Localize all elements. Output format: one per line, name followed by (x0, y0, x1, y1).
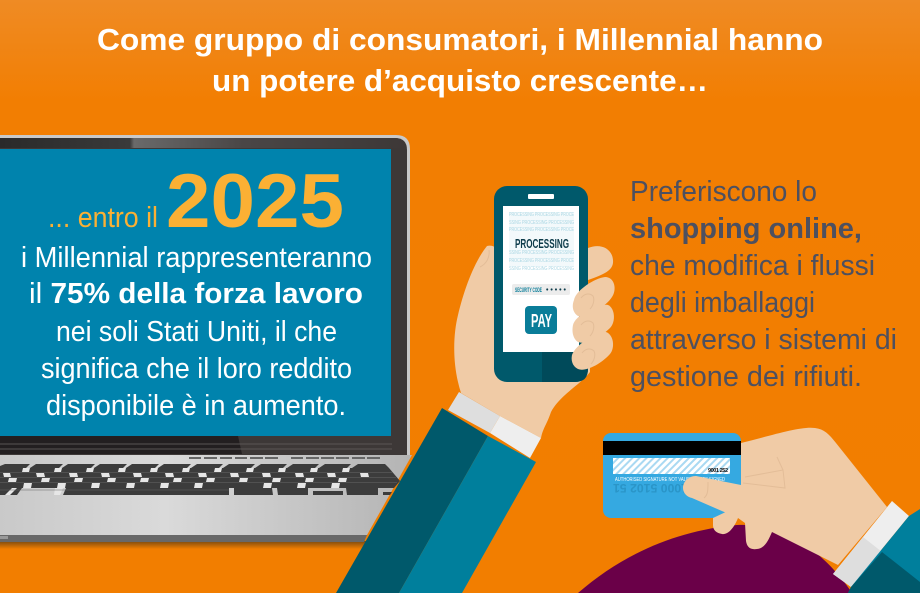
processing text: PROCESSING PROCESSING PROCE (509, 227, 574, 233)
laptop shadow (0, 541, 368, 549)
hand palm (454, 246, 613, 438)
processing text (509, 212, 574, 272)
thumb crease (480, 250, 489, 267)
hand (713, 428, 887, 565)
mirrored card number: 1000 5102 51 (613, 481, 688, 495)
purple semicircle (578, 525, 852, 593)
pay button: PAY (531, 311, 552, 331)
laptop front strip (0, 535, 367, 542)
screen text: nei soli Stati Uniti, il che (56, 316, 337, 348)
right text block: degli imballaggi (630, 287, 815, 319)
screen text: disponibile è in aumento. (46, 390, 346, 422)
processing text: PROCESSING PROCESSING PROCE (509, 212, 574, 218)
left sleeve and hand holding phone (336, 246, 613, 593)
right text block: gestione dei rifiuti. (630, 361, 862, 393)
security code: ••••• (546, 287, 567, 294)
knuckle creases (704, 457, 785, 498)
processing text: SSING PROCESSING PROCESSING (509, 220, 574, 226)
right text block: che modifica i flussi (630, 250, 875, 282)
screen headline: ... entro il (48, 202, 158, 234)
title: Come gruppo di consumatori, i Millennial hanno (97, 22, 823, 57)
security code: SECURITY CODE (515, 288, 542, 294)
right hand holding card (683, 428, 920, 593)
credit card (603, 433, 741, 518)
screen text: il 75% della forza lavoro (29, 278, 363, 310)
card code: 9001 252 (708, 468, 728, 474)
processing text: SSING PROCESSING PROCESSING (509, 266, 574, 272)
authorised signature: AUTHORISED SIGNATURE NOT VALID UNLESS SIGNED (615, 477, 725, 483)
processing text: PROCESSING PROCESSING PROCE (509, 258, 574, 264)
sleeve (848, 509, 920, 593)
cuff (833, 501, 909, 587)
function key dashes (189, 457, 380, 459)
laptop (0, 135, 412, 549)
screen text (21, 242, 372, 422)
phone speaker (528, 194, 554, 199)
laptop screen (0, 149, 391, 436)
index finger (683, 476, 745, 518)
laptop base (0, 455, 412, 535)
laptop bezel (0, 135, 410, 456)
title: un potere d’acquisto crescente… (212, 63, 708, 98)
screen text: significa che il loro reddito (41, 353, 352, 385)
sleeve (336, 408, 488, 593)
phone body (494, 186, 588, 382)
screen headline (48, 159, 344, 244)
processing text: SSING PROCESSING PROCESSING (509, 250, 574, 256)
magnetic strip (603, 441, 741, 455)
title (97, 22, 823, 98)
right text block: attraverso i sistemi di (630, 324, 897, 356)
pay button (525, 306, 557, 334)
right text block (630, 176, 897, 393)
cuff (448, 392, 500, 433)
processing heading: PROCESSING (515, 236, 569, 251)
signature panel (613, 458, 730, 474)
phone hand fingers (572, 277, 615, 370)
phone screen (503, 206, 579, 352)
screen text: i Millennial rappresenteranno (21, 242, 372, 274)
keyboard (0, 464, 400, 495)
right text block: shopping online, (630, 213, 862, 245)
phone (494, 186, 588, 382)
right text block: Preferiscono lo (630, 176, 817, 208)
screen headline: 2025 (166, 159, 344, 244)
security code (512, 284, 570, 295)
